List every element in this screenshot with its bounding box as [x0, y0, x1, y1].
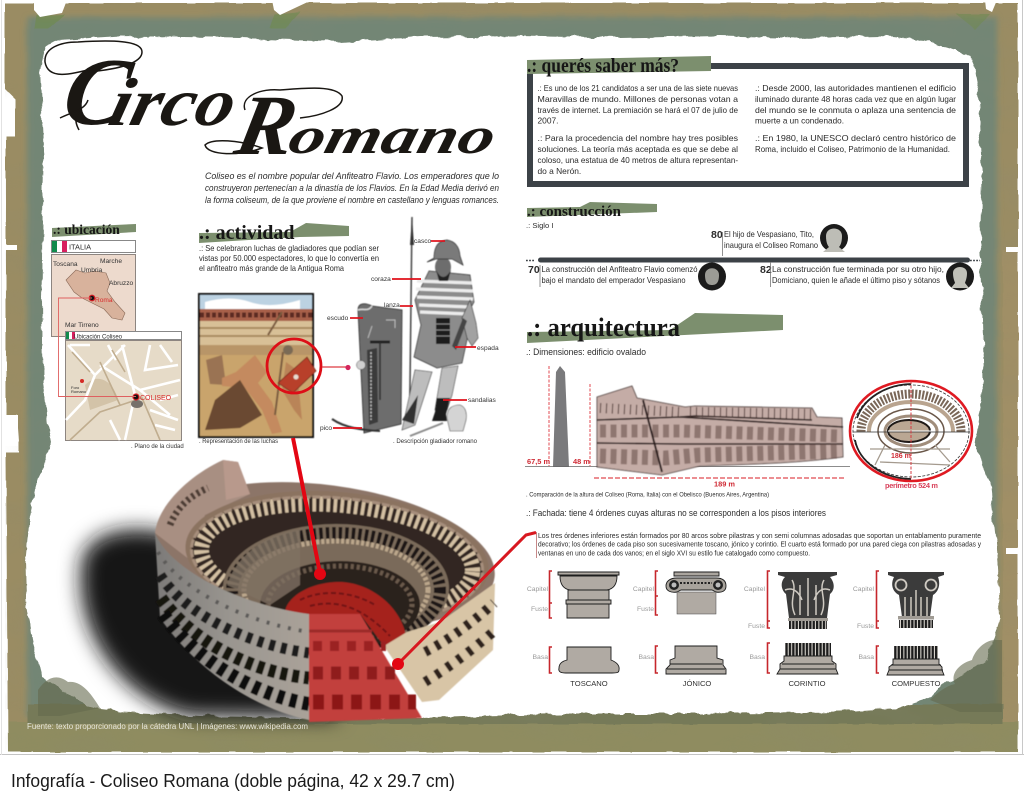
text: fachada: .: Fachada: tiene 4 órdenes cuyas alturas no se corresponden a los pisos interiores	[526, 507, 826, 518]
text column left: coloso, una estatua de 40 metros de altura representan-	[538, 155, 738, 165]
labels: partes del gladiador: coraza	[371, 276, 391, 283]
upper interior	[146, 460, 504, 652]
plan drawing of Coliseo: 186 m	[891, 453, 911, 460]
perimeter label: perímetro 524 m	[885, 481, 938, 490]
text column right: .: En 1980, la UNESCO declaró centro histórico de	[755, 133, 956, 143]
text: actividad: vistas por 50.000 espectadores, lo que lo convertía en	[199, 253, 379, 263]
column: corintio: Fuste	[748, 623, 765, 630]
text column left: 2007.	[538, 116, 558, 126]
event: 70: 70	[528, 264, 540, 276]
red arena	[285, 582, 407, 646]
labels: partes del gladiador: escudo	[327, 315, 349, 322]
column: jonico: Capitel	[633, 586, 654, 593]
source credit: Fuente: texto proporcionado por la cátedra UNL | Imágenes: www.wikipedia.com	[27, 722, 308, 731]
event: 80: El hijo de Vespasiano, Tito,	[724, 230, 814, 239]
title	[45, 39, 502, 173]
timeline bar	[526, 258, 980, 262]
ornate corner foliage	[930, 640, 1002, 712]
column: compuesto	[853, 571, 944, 688]
intro text	[205, 170, 499, 205]
column: toscano: Fuste	[531, 606, 548, 613]
callout: circulo sobre escudo	[267, 339, 351, 393]
event: 82: Domiciano, quien le añade el último piso y sótanos	[772, 276, 940, 285]
panel: ubicacion	[52, 222, 184, 450]
panel: actividad	[199, 217, 499, 445]
heading: actividad	[199, 222, 349, 244]
heading: actividad: .: actividad	[199, 222, 295, 244]
column: toscano: TOSCANO	[570, 679, 608, 688]
text column left: través de internet. La premiación se hará el 07 de julio de	[538, 105, 738, 115]
panel: arquitectura	[525, 313, 981, 688]
labels: partes del gladiador	[320, 238, 499, 432]
map: Italia: Mar Tirreno	[65, 322, 99, 329]
text: ordenes	[536, 531, 981, 558]
map: Italia: ITALIA	[69, 242, 91, 252]
text column right: Roma, incluido el Coliseo, Patrimonio de la Humanidad.	[755, 144, 950, 154]
panel: queres saber mas	[527, 55, 966, 184]
caption: comparacion: . Comparación de la altura del Coliseo (Roma, Italia) con el Obelisco (Buenos Aires, Argentina)	[526, 492, 769, 498]
intro text: Coliseo es el nombre popular del Anfiteatro Flavio. Los emperadores que lo	[205, 170, 499, 181]
map: Italia: Abruzzo	[109, 280, 134, 287]
obelisk comparison	[525, 366, 850, 467]
text column left: do a Nerón.	[538, 166, 581, 176]
column: compuesto: Fuste	[857, 623, 874, 630]
column: corintio: Basa	[750, 654, 765, 661]
event: 70: bajo el mandato del emperador Vespasiano	[542, 276, 686, 285]
event: 80	[711, 224, 848, 256]
column: compuesto: Basa	[858, 654, 874, 661]
map: Italia: Umbria	[81, 267, 103, 274]
column: corintio	[744, 571, 838, 688]
event: 70: La construcción del Anfiteatro Flavio comenzó	[542, 265, 698, 274]
column: jonico	[633, 571, 726, 688]
captions: actividad: . Descripción gladiador romano	[393, 438, 478, 445]
column: toscano: Basa	[532, 654, 548, 661]
red cut-away section	[309, 614, 422, 722]
map: ubicacion Coliseo: Ubicación Coliseo	[74, 334, 123, 340]
elevation drawing of Coliseo	[597, 386, 843, 475]
illustration: coliseo	[81, 460, 504, 722]
column: jonico: JÓNICO	[683, 679, 711, 688]
obelisk comparison: 67,5 m	[527, 457, 550, 466]
heading: construccion: .: construcción	[527, 204, 621, 220]
heading: queres saber mas: .: querés saber más?	[527, 55, 679, 77]
text column left	[538, 83, 738, 176]
text: ordenes: decorativo; los órdenes de cada piso son sucesivamente toscano, jónico y corintio. El cuarto está formado por una pared ciega con pilastras adosadas y	[538, 540, 981, 548]
white notches	[0, 0, 1020, 554]
title: irco	[102, 64, 245, 140]
labels: partes del gladiador: lanza	[384, 302, 400, 309]
column: toscano	[527, 571, 619, 688]
title: omano	[283, 108, 502, 165]
text column left: .: Para la procedencia del nombre hay tres posibles	[538, 133, 738, 143]
page caption: Infografía - Coliseo Romana (doble página, 42 x 29.7 cm)	[11, 771, 455, 791]
text box	[530, 66, 966, 184]
illustration: escudo	[332, 304, 402, 433]
red connector: lucha a arena	[293, 438, 326, 580]
column: compuesto: Capitel	[853, 586, 874, 593]
text column right: iluminado durante 48 horas cada vez que en algún lugar	[755, 94, 956, 104]
plan drawing of Coliseo	[850, 381, 972, 481]
column: corintio: CORINTIO	[788, 679, 826, 688]
text column right	[755, 83, 956, 154]
shadow	[81, 529, 340, 718]
red connector: fachada a muro	[392, 532, 536, 670]
text: ordenes: Los tres órdenes inferiores están formados por 80 arcos sobre pilastras y con semi columnas adosadas que soportan un entablamento puramente	[538, 531, 981, 540]
labels: partes del gladiador: casco	[414, 238, 432, 245]
panel: construccion	[526, 202, 980, 290]
captions: actividad: . Representación de las luchas	[199, 438, 278, 445]
event: 82: La construcción fue terminada por su otro hijo,	[772, 265, 944, 274]
heading: ubicacion: .: ubicación	[53, 222, 120, 237]
column: jonico: Fuste	[637, 606, 654, 613]
text column left: .: Es uno de los 21 candidatos a ser una de las siete nuevas	[538, 83, 738, 93]
heading: arquitectura: .: arquitectura	[527, 313, 680, 342]
left outer wall	[155, 533, 309, 720]
text column right: muerte a un condenado.	[755, 116, 844, 126]
event: 80: inaugura el Coliseo Romano	[724, 241, 818, 250]
map: ubicacion Coliseo: Foro	[71, 385, 80, 390]
column: corintio: Capitel	[744, 586, 765, 593]
right outer wall	[384, 583, 495, 702]
labels: partes del gladiador: espada	[477, 345, 499, 352]
caption: plano: . Plano de la ciudad	[131, 444, 184, 450]
text: actividad: .: Se celebraron luchas de gladiadores que podían ser	[199, 243, 379, 253]
text: dimensiones: .: Dimensiones: edificio ovalado	[526, 347, 646, 358]
column: toscano: Capitel	[527, 586, 548, 593]
text: actividad	[199, 243, 379, 273]
labels: partes del gladiador: pico	[320, 425, 332, 432]
captions: actividad	[199, 438, 478, 445]
text: actividad: el anfiteatro más grande de la Antigua Roma	[199, 263, 344, 273]
obelisk comparison: 48 m	[573, 457, 590, 466]
event: 70	[528, 262, 726, 290]
intro text: la forma coliseum, de la que proviene el nombre en castellano y lenguas romances.	[205, 194, 499, 205]
connector: Roma a Coliseo	[58, 298, 136, 396]
illustration: gladiador romano	[402, 217, 478, 436]
map: Italia	[52, 240, 136, 336]
map: Italia: Marche	[100, 258, 122, 265]
map: ubicacion Coliseo: Romano	[71, 389, 87, 394]
column: jonico: Basa	[638, 654, 654, 661]
text: siglo: .: Siglo I	[526, 221, 553, 230]
heading: construccion	[527, 202, 657, 220]
map: Italia: Roma	[95, 297, 113, 304]
text column left: Maravillas de mundo. Millones de personas votan a	[538, 94, 738, 104]
text column right: .: Desde 2000, las autoridades mantienen el edificio	[755, 83, 956, 93]
title: R	[227, 78, 306, 173]
text: ordenes: ventanas en uno de cada dos vanos; en el siglo XVI su estilo fue catalogado como compuesto.	[538, 548, 810, 558]
intro text: construyeron pertenecían a la dinastía de los Flavios. En la Edad Media derivó en	[205, 182, 499, 193]
event: 80: 80	[711, 229, 723, 241]
map: Italia: Toscana	[53, 261, 78, 268]
text column right: del mundo se le conmuta o aplaza una sentencia de	[755, 105, 956, 115]
title: C	[56, 39, 141, 145]
map: ubicacion Coliseo: COLISEO	[140, 395, 172, 402]
heading: arquitectura	[527, 313, 783, 343]
event: 82: 82	[760, 264, 772, 276]
event: 82	[760, 262, 974, 290]
labels: partes del gladiador: sandalias	[468, 397, 497, 404]
illustration: lucha de gladiadores	[199, 294, 316, 437]
text column left: soluciones. La teoría más aceptada es que se debe al	[538, 144, 738, 154]
map: ubicacion Coliseo	[66, 332, 182, 440]
dimension: 189 m: 189 m	[714, 480, 735, 488]
column: compuesto: COMPUESTO	[892, 679, 940, 688]
